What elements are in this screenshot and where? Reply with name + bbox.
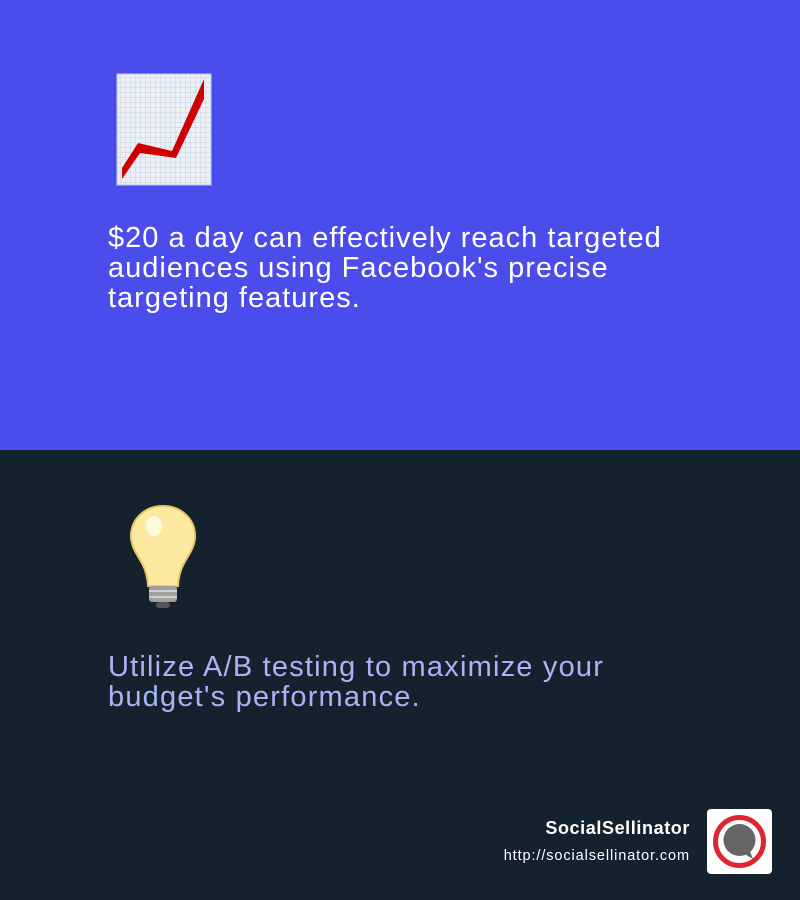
text: top statement — [108, 222, 662, 314]
icon: chart — [116, 74, 212, 186]
text: bottom statement — [108, 651, 604, 713]
panel: top — [0, 0, 800, 450]
text: top statement: $20 a day can effectively reach targeted — [108, 222, 662, 254]
footer: brand: SocialSellinator — [545, 818, 690, 838]
text: top statement: audiences using Facebook's precise — [108, 252, 609, 284]
logo — [707, 809, 772, 874]
icon: light bulb — [130, 505, 196, 608]
text: bottom statement: Utilize A/B testing to maximize your — [108, 651, 604, 683]
text: top statement: targeting features. — [108, 282, 361, 314]
footer: brand: http://socialsellinator.com — [504, 848, 690, 864]
footer: brand — [504, 818, 690, 864]
text: bottom statement: budget's performance. — [108, 681, 421, 713]
panel: bottom — [0, 450, 800, 900]
